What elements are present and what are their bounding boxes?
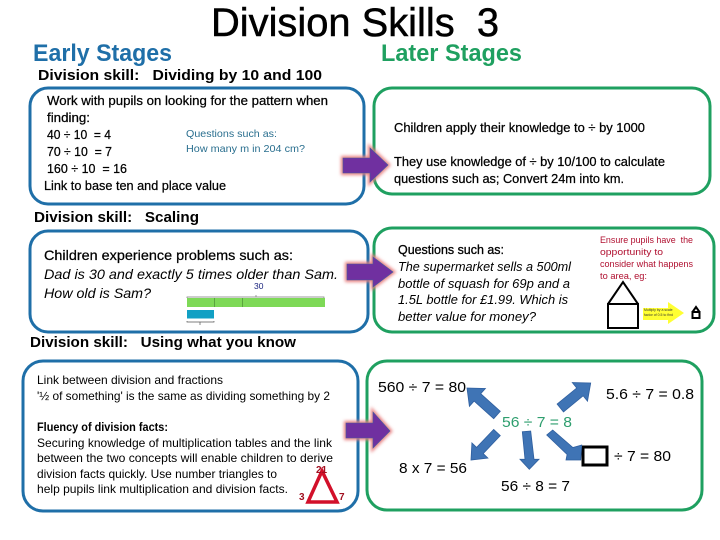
- text: questions: [186, 128, 305, 155]
- panel: using what you know: [23, 361, 358, 511]
- text: fractions link: '½ of something' is the same as dividing something by 2: [37, 389, 330, 403]
- text: pattern examples: Link to base ten and place value: [44, 178, 226, 193]
- text: questions: How many m in 204 cm?: [186, 143, 305, 155]
- text: related facts: 560 ÷ 7 = 80: [378, 379, 466, 396]
- panel: related facts: [367, 361, 702, 510]
- arrow: yellow scale arrow: Multiply by a scale: [644, 308, 673, 312]
- text: pattern examples: 160 ÷ 10 = 16: [47, 161, 127, 176]
- text: scaling problem: Children experience problems such as:: [44, 247, 293, 263]
- text: fluency: between the two concepts will enable children to derive: [37, 451, 333, 465]
- text: related facts: 56 ÷ 8 = 7: [501, 478, 570, 495]
- icon: number triangle: 7: [339, 492, 345, 503]
- text: questions: Questions such as:: [186, 128, 277, 140]
- text: pattern examples: finding:: [47, 110, 90, 125]
- text: area note: [600, 235, 693, 282]
- text: pattern examples: 70 ÷ 10 = 7: [47, 144, 112, 159]
- icon: number triangle: 21: [316, 465, 328, 476]
- arrow: scaling panels: [347, 257, 393, 287]
- text: supermarket question: Questions such as:: [398, 242, 504, 257]
- text: pattern examples: [44, 93, 328, 193]
- icon: small house: [692, 307, 700, 318]
- text: supermarket question: 1.5L bottle for £1.99. Which is: [398, 292, 568, 307]
- text: fluency: help pupils link multiplication and division facts.: [37, 482, 288, 496]
- text: fluency: [37, 420, 333, 496]
- text: pattern examples: Work with pupils on looking for the pattern when: [47, 93, 328, 108]
- text: scaling problem: How old is Sam?: [44, 285, 151, 301]
- text: area note: opportunity to: [600, 247, 663, 258]
- bar model: [187, 281, 325, 325]
- panel: scaling: [30, 231, 368, 332]
- icon: large house: [608, 282, 638, 328]
- heading: using what you know: Division skill: Using what you know: [30, 334, 296, 351]
- text: related facts: 56 ÷ 7 = 8: [502, 414, 572, 431]
- text: later stage division: Children apply their knowledge to ÷ by 1000: [394, 120, 645, 135]
- text: related facts: 5.6 ÷ 7 = 0.8: [606, 386, 694, 403]
- text: area note: Ensure pupils have the: [600, 235, 693, 246]
- arrows: related fact arrows: [467, 383, 591, 469]
- text: supermarket question: better value for money?: [398, 309, 537, 324]
- panel: apply knowledge: [374, 88, 710, 194]
- text: supermarket question: bottle of squash for 69p and a: [398, 276, 570, 291]
- bar model: 30: [254, 281, 264, 291]
- text: supermarket question: The supermarket sells a 500ml: [398, 259, 572, 274]
- text: fluency: Securing knowledge of multiplication tables and the link: [37, 436, 333, 450]
- icon: blank box: [583, 447, 607, 465]
- text: related facts: [378, 379, 694, 495]
- heading: dividing by 10 and 100: Division skill: Dividing by 10 and 100: [38, 67, 322, 84]
- text: area note: to area, eg:: [600, 271, 647, 282]
- text: later stage division: questions such as; Convert 24m into km.: [394, 171, 624, 186]
- icon: number triangle: [299, 465, 345, 503]
- heading: early stages: Early Stages: [33, 40, 172, 67]
- text: scaling problem: Dad is 30 and exactly 5 times older than Sam.: [44, 266, 338, 282]
- text: pattern examples: 40 ÷ 10 = 4: [47, 127, 111, 142]
- text: later stage division: [394, 120, 665, 186]
- heading: scaling: Division skill: Scaling: [34, 209, 199, 226]
- text: fractions link: Link between division and fractions: [37, 373, 223, 387]
- text: fluency: division facts quickly. Use number triangles to: [37, 467, 277, 481]
- text: later stage division: They use knowledge of ÷ by 10/100 to calculate: [394, 154, 665, 169]
- title: Division Skills 3: [211, 1, 499, 45]
- text: supermarket question: [398, 242, 572, 324]
- text: related facts: ÷ 7 = 80: [614, 448, 671, 465]
- text: scaling problem: [44, 247, 338, 301]
- arrow: related panels: [346, 412, 390, 448]
- text: fluency: Fluency of division facts:: [37, 420, 168, 434]
- text: area note: consider what happens: [600, 259, 693, 270]
- text: related facts: 8 x 7 = 56: [399, 460, 467, 477]
- panel: dividing by 10 and 100: [30, 88, 364, 204]
- arrow: yellow scale arrow: factor of 0.5 to find: [644, 313, 673, 317]
- icon: number triangle: 3: [299, 492, 305, 503]
- heading: later stages: Later Stages: [381, 40, 522, 67]
- arrow: yellow scale arrow: [643, 302, 684, 324]
- arrow: dividing panels: [343, 148, 388, 182]
- text: fractions link: [37, 373, 330, 403]
- panel: value for money: [374, 228, 714, 332]
